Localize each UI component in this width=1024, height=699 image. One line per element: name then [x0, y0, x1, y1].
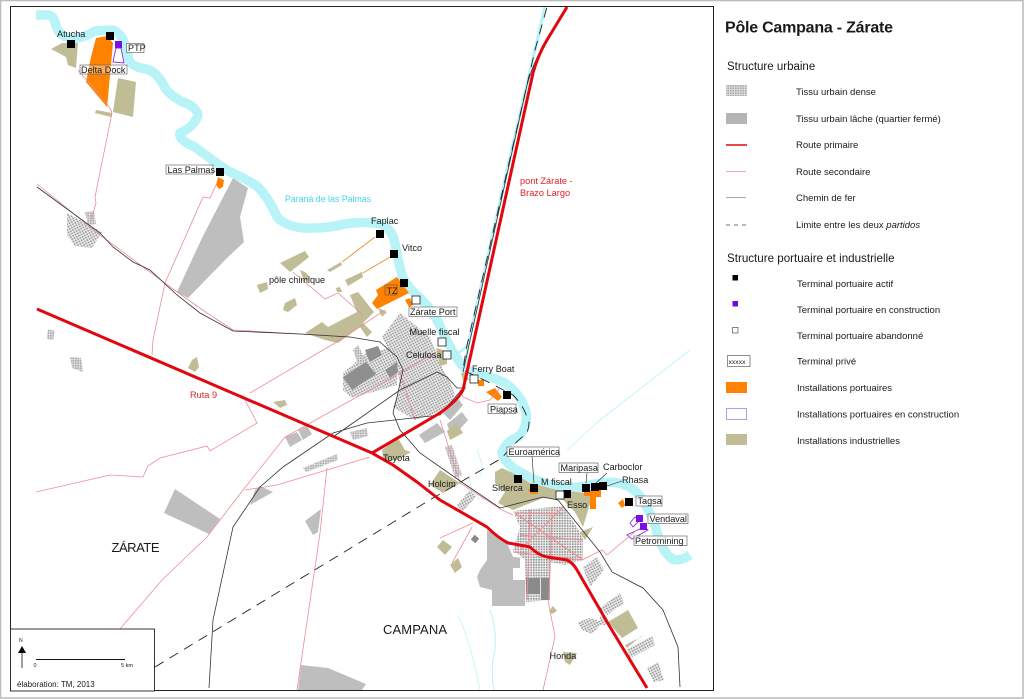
terminal labels: M fiscal: [541, 477, 572, 487]
terminal labels: Ferry Boat: [472, 364, 515, 374]
terminal labels: Zárate Port: [410, 307, 456, 317]
terminal labels: Siderca: [492, 483, 524, 493]
legend section: urban structure: Tissu urbain lâche (quartier fermé): [796, 114, 941, 125]
map labels: river, roads: Paraná de las Palmas: [285, 194, 372, 204]
legend section: port and industrial structure: Terminal privé: [797, 356, 856, 368]
legend section: urban structure: [726, 61, 941, 231]
terminal labels: pôle chimique: [269, 275, 325, 285]
terminal labels: Muelle fiscal: [410, 327, 460, 337]
river: Paraná de las Palmas: [36, 7, 690, 690]
district names: [112, 540, 447, 637]
map frame: [10, 6, 714, 690]
terminal labels: Carboclor: [603, 462, 642, 472]
Campana main streets: [513, 507, 583, 600]
legend section: urban structure: Structure urbaine: [727, 61, 815, 73]
title: Pôle Campana - Zárate: [725, 20, 893, 36]
legend section: port and industrial structure: Installations industrielles: [797, 436, 900, 447]
scale bar: [34, 660, 133, 669]
terminal labels: Las Palmas: [168, 165, 215, 175]
scale bar: 0: [34, 663, 37, 669]
terminals: under construction: [115, 41, 647, 530]
terminals: active: [67, 32, 633, 506]
terminal labels: Maripasa: [560, 463, 599, 473]
legend section: port and industrial structure: xxxxx: [728, 359, 746, 366]
secondary roads: [36, 70, 637, 690]
large gated residential zones: [164, 178, 527, 690]
legend section: port and industrial structure: [726, 252, 959, 447]
scale and north box: [10, 629, 154, 691]
map panel: [10, 6, 714, 691]
dense urban fabric: [47, 211, 664, 682]
legend section: port and industrial structure: Terminal portuaire abandonné: [797, 331, 923, 342]
legend section: port and industrial structure: Terminal portuaire en construction: [797, 305, 940, 316]
terminal labels: Esso: [567, 500, 587, 510]
legend section: port and industrial structure: Terminal portuaire actif: [797, 279, 893, 290]
district names: CAMPANA: [383, 622, 447, 637]
map labels: river, roads: pont Zárate -: [520, 176, 573, 186]
terminal labels: TZ: [386, 286, 398, 296]
terminal labels: Tagsa: [638, 496, 663, 506]
terminal labels: Celulosa: [406, 350, 442, 360]
terminal labels: Vitco: [402, 243, 422, 253]
legend panel: [725, 20, 959, 447]
terminal labels: [57, 29, 688, 661]
legend section: urban structure: Route primaire: [796, 140, 858, 151]
legend section: port and industrial structure: Structure portuaire et industrielle: [727, 252, 895, 265]
terminal labels: Honda: [550, 651, 577, 661]
terminal labels: Faplac: [371, 216, 399, 226]
legend section: urban structure: Route secondaire: [796, 167, 870, 178]
terminal labels: Atucha: [57, 29, 86, 39]
terminal labels: Euroamérica: [508, 447, 561, 457]
terminal labels: Piapsa: [490, 404, 519, 414]
legend section: urban structure: Chemin de fer: [796, 193, 856, 204]
legend section: urban structure: Limite entre les deux partidos: [796, 220, 920, 231]
terminal labels: Toyota: [383, 453, 411, 463]
terminal labels: Rhasa: [622, 475, 649, 485]
map labels: river, roads: Ruta 9: [190, 390, 217, 400]
map labels: river, roads: Brazo Largo: [520, 188, 570, 198]
legend section: port and industrial structure: Installations portuaires: [797, 383, 892, 394]
terminal labels: Holcim: [428, 479, 456, 489]
terminals: abandoned: [412, 296, 564, 499]
map labels: river, roads: [190, 176, 573, 400]
railways: [37, 38, 680, 688]
legend section: urban structure: Tissu urbain dense: [796, 87, 876, 98]
primary roads: [37, 7, 647, 688]
district names: ZÁRATE: [112, 540, 160, 555]
terminal labels: Petromining: [635, 536, 684, 546]
terminal labels: PTP: [128, 43, 146, 53]
terminal labels: Delta Dock: [81, 65, 126, 75]
scale bar: 5 km: [121, 663, 133, 669]
boundary between the two partidos: [155, 7, 547, 667]
legend section: port and industrial structure: Installations portuaires en construction: [797, 410, 959, 420]
scale and north box: élaboration: TM, 2013: [17, 680, 95, 689]
north arrow: N: [19, 638, 23, 644]
port installations and industrial zones: [51, 43, 645, 665]
north arrow: [18, 638, 26, 668]
terminal labels: Vendaval: [650, 514, 687, 524]
